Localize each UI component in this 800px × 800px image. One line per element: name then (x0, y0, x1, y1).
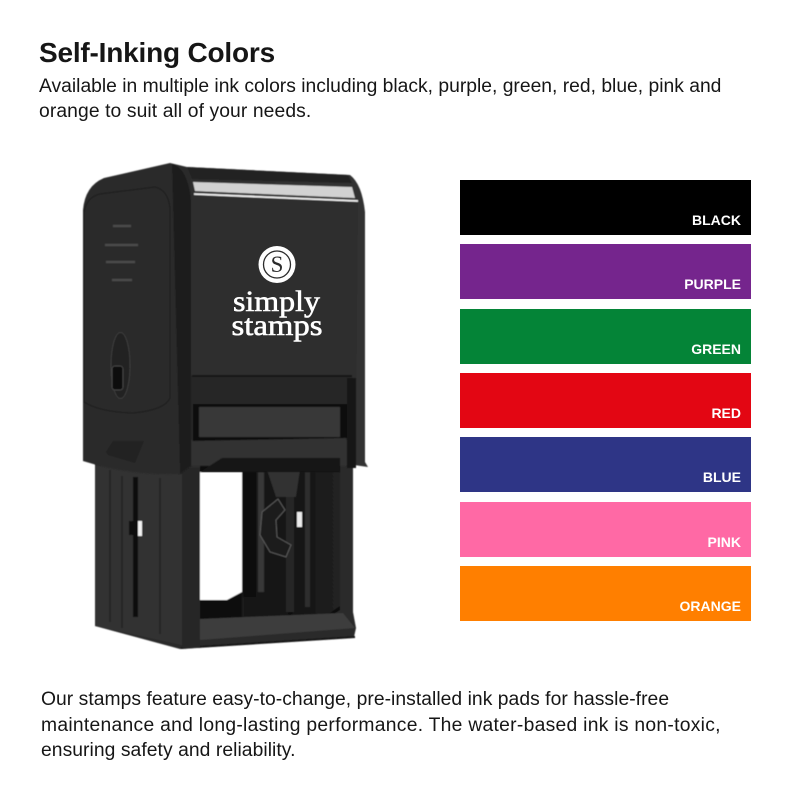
swatch: green: GREEN (691, 340, 741, 356)
swatch: black: BLACK (692, 212, 741, 228)
footer text: ensuring safety and reliability. (41, 740, 296, 761)
swatch: purple (460, 244, 751, 298)
ink pad slot (191, 376, 352, 440)
swatch: pink (460, 502, 751, 556)
swatch: orange: ORANGE (680, 598, 741, 614)
swatch: blue (460, 437, 751, 492)
maker mark (106, 441, 144, 463)
logo: S (271, 252, 283, 277)
swatch: orange (460, 566, 751, 620)
swatch: pink: PINK (708, 534, 741, 550)
footer text: maintenance and long-lasting performance. The water-based ink is non-toxic, (41, 714, 721, 736)
intro text (39, 76, 721, 122)
stamp body (83, 163, 368, 474)
intro text: Available in multiple ink colors including black, purple, green, red, blue, pink and (39, 76, 721, 97)
footer text: Our stamps feature easy-to-change, pre-installed ink pads for hassle-free (41, 689, 669, 710)
footer text (41, 689, 721, 761)
top window (187, 167, 352, 183)
side button (111, 332, 130, 398)
swatch: green (460, 309, 751, 364)
swatch: purple: PURPLE (684, 276, 741, 292)
logo: stamps (232, 309, 322, 342)
stamp legs (95, 456, 356, 649)
logo (232, 246, 322, 342)
title: Self-Inking Colors (39, 37, 275, 68)
swatch: black (460, 180, 751, 234)
logo: simply (233, 285, 320, 318)
swatch: red (460, 373, 751, 428)
swatch: red: RED (711, 404, 741, 420)
swatch: blue: BLUE (703, 468, 741, 484)
intro text: orange to suit all of your needs. (39, 100, 311, 122)
side panel (84, 187, 170, 413)
